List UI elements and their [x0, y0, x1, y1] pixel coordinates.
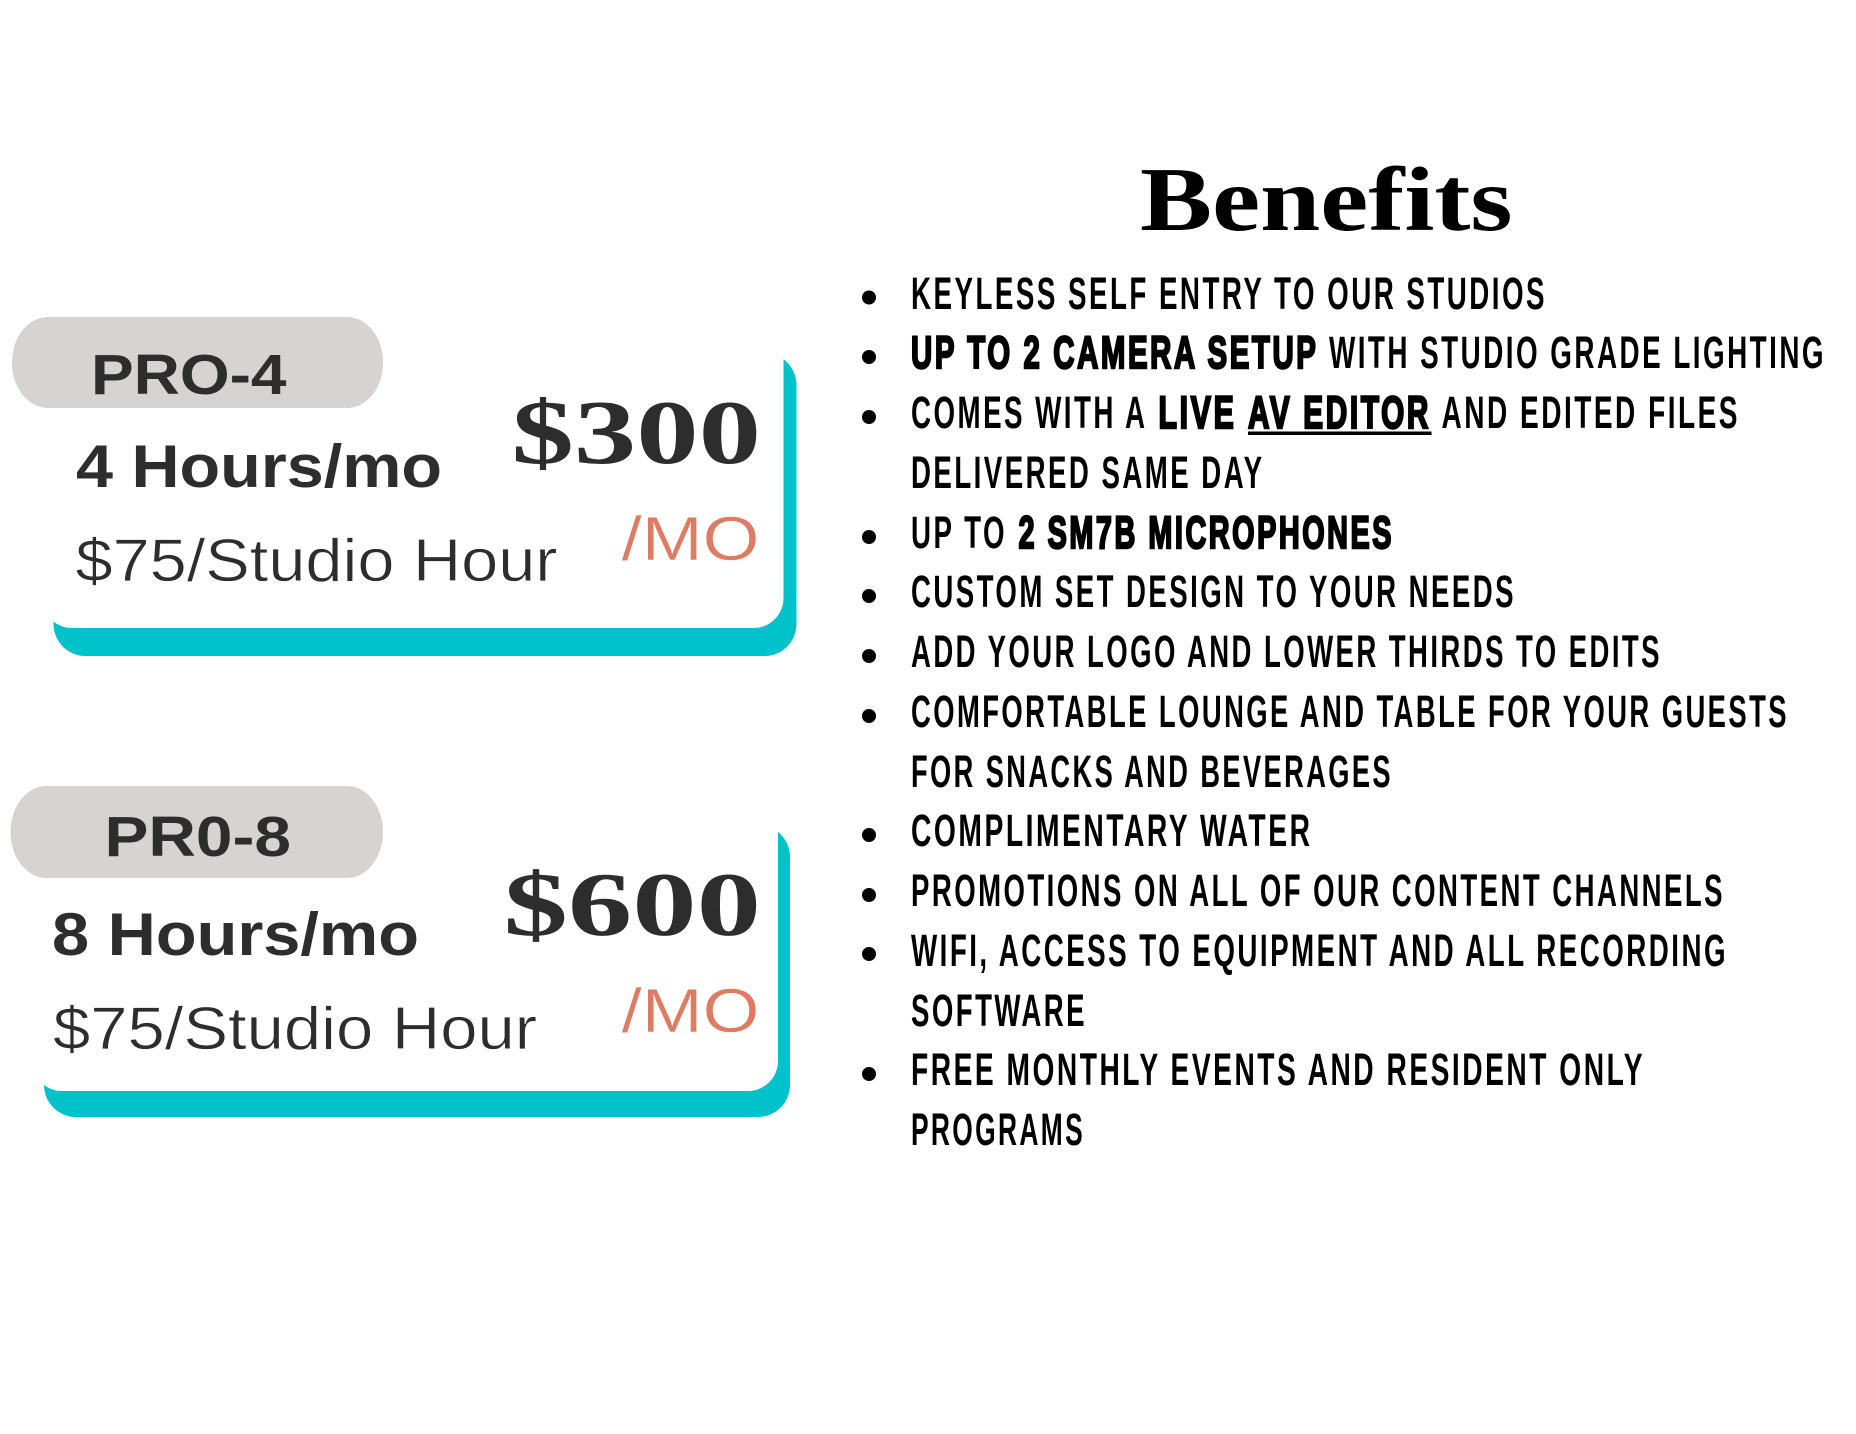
item: microphones: [862, 507, 1394, 558]
heading: Benefits: Benefits: [1140, 149, 1512, 250]
plan name: PR0-8: [104, 805, 291, 869]
item: keyless entry: [862, 268, 1547, 319]
item: lounge: FOR SNACKS AND BEVERAGES: [911, 746, 1393, 797]
tab: PR0-8: [10, 786, 383, 878]
panel: PRO-8 plan: [10, 770, 790, 1117]
price: $300: [512, 382, 761, 483]
panel: PRO-4 plan: [12, 300, 796, 656]
per month: /MO: [622, 505, 760, 574]
hours: 8 Hours/mo: [52, 901, 419, 968]
item: camera setup: [862, 327, 1826, 378]
item: microphones: UP TO: [911, 507, 1007, 558]
item: live AV editor: AV EDITOR: [1248, 387, 1431, 438]
item: set design: [862, 566, 1516, 617]
benefits list: [862, 268, 1826, 1155]
item: live AV editor: LIVE: [1158, 387, 1236, 438]
item: water: COMPLIMENTARY WATER: [911, 805, 1312, 856]
item: wifi: SOFTWARE: [911, 985, 1087, 1036]
hourly rate: $75/Studio Hour: [76, 527, 558, 594]
tab: PRO-4: [12, 317, 383, 408]
card shadow: teal: [54, 353, 796, 656]
item: events: PROGRAMS: [911, 1104, 1085, 1155]
item: live AV editor: [862, 387, 1740, 498]
item: water: [862, 805, 1312, 856]
hours: 4 Hours/mo: [76, 433, 442, 500]
item: wifi: [862, 925, 1728, 1036]
item: live AV editor: COMES WITH A: [911, 387, 1148, 438]
item: live AV editor: DELIVERED SAME DAY: [911, 447, 1264, 498]
hourly rate: $75/Studio Hour: [53, 995, 537, 1062]
item: microphones: 2 SM7B MICROPHONES: [1018, 507, 1394, 558]
card shadow: teal: [44, 825, 790, 1117]
item: camera setup: UP TO 2 CAMERA SETUP: [911, 327, 1318, 378]
per month: /MO: [622, 977, 760, 1046]
item: events: [862, 1044, 1645, 1155]
price: $600: [504, 854, 761, 955]
card body: [42, 300, 784, 628]
card body: [32, 770, 778, 1091]
plan name: PRO-4: [91, 343, 287, 407]
item: lounge: [862, 686, 1789, 797]
